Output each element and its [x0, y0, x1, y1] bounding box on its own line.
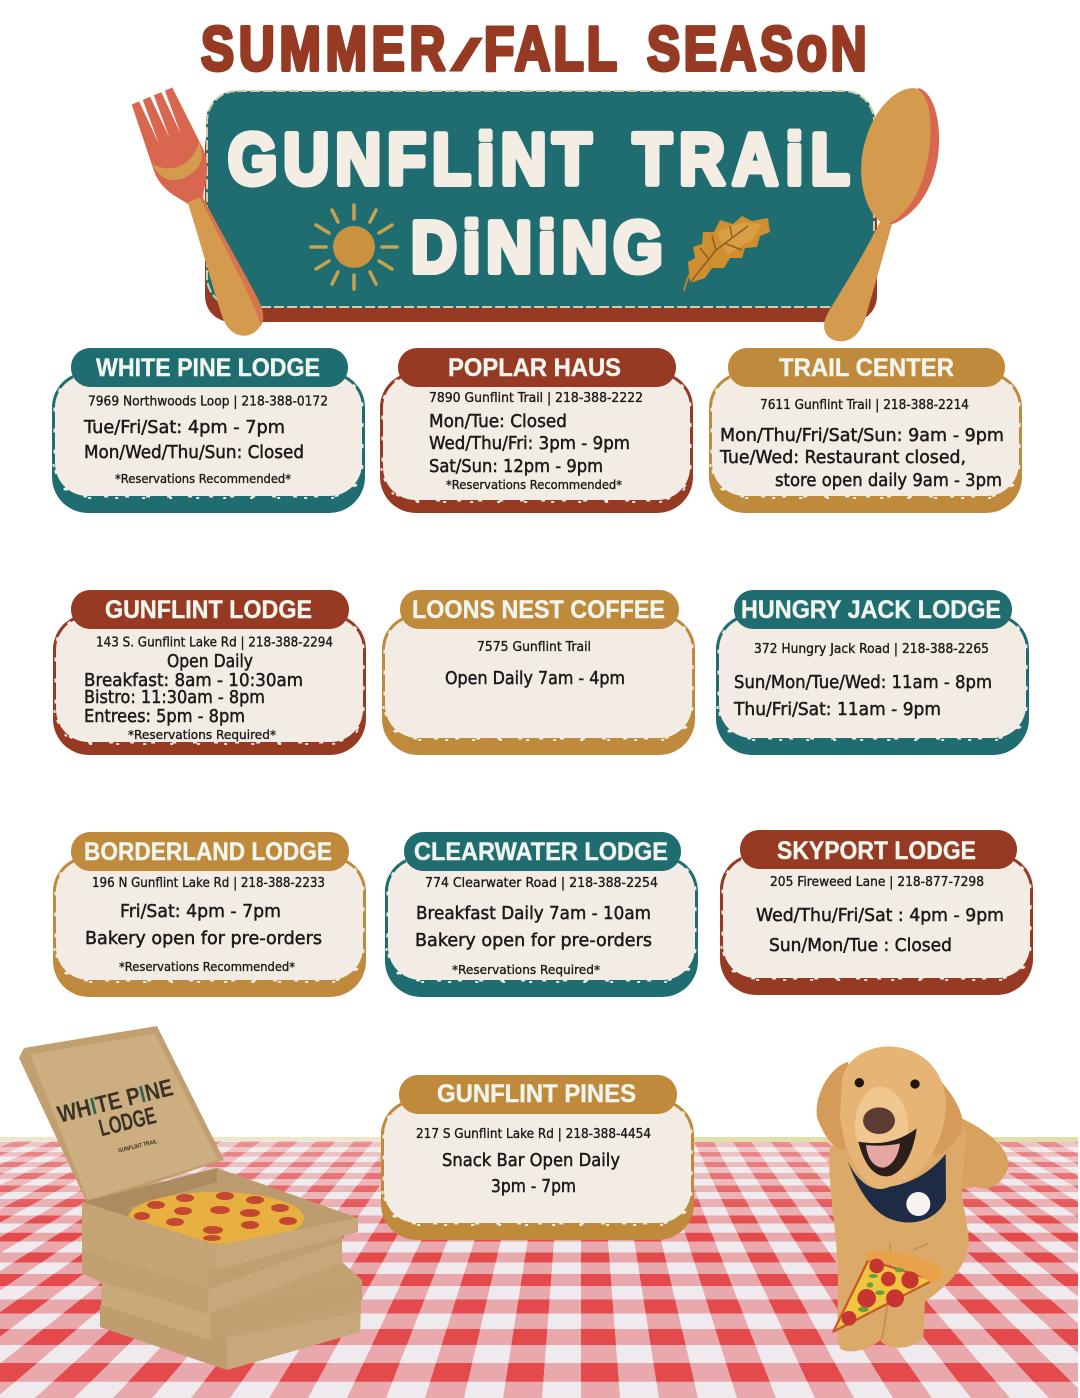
icon: fork — [127, 86, 276, 345]
heading: CLEARWATER LODGE — [414, 838, 668, 866]
note: *Reservations Recommended* — [446, 477, 622, 492]
panel: Loons Nest Coffee — [382, 590, 695, 755]
heading: LOONS NEST COFFEE — [412, 596, 665, 624]
title: Summer/Fall Season — [201, 14, 870, 83]
address: 7611 Gunflint Trail | 218-388-2214 — [760, 398, 969, 413]
address: 205 Fireweed Lane | 218-877-7298 — [770, 875, 984, 890]
address: 196 N Gunflint Lake Rd | 218-388-2233 — [92, 876, 325, 891]
hours: Wed/Thu/Fri/Sat : 4pm - 9pm — [756, 905, 1004, 926]
bandana — [847, 1154, 946, 1222]
panel: Gunflint Lodge — [53, 590, 366, 755]
heading: HUNGRY JACK LODGE — [741, 596, 1001, 624]
note: *Reservations Recommended* — [115, 471, 291, 486]
banner heading: DiNiNG — [411, 208, 669, 288]
hours — [415, 903, 652, 951]
hours: Mon/Wed/Thu/Sun: Closed — [84, 442, 304, 463]
address: 7890 Gunflint Trail | 218-388-2222 — [429, 391, 643, 406]
heading: SKYPORT LODGE — [777, 837, 976, 865]
title: Summer/Fall Season: SUMMER — [201, 14, 450, 83]
heading: TRAIL CENTER — [779, 354, 954, 382]
hours: Breakfast: 8am - 10:30am — [84, 670, 303, 691]
hours — [429, 411, 630, 477]
nose — [863, 1107, 895, 1134]
address: 372 Hungry Jack Road | 218-388-2265 — [754, 642, 989, 657]
title: Summer/Fall Season: FALL — [484, 14, 620, 83]
heading: POPLAR HAUS — [448, 354, 621, 382]
pizza — [128, 1192, 304, 1244]
hours — [442, 1150, 620, 1197]
hours: Open Daily 7am - 4pm — [445, 668, 625, 689]
note: *Reservations Required* — [452, 962, 600, 977]
illustration: stack of pizza boxes — [19, 1026, 362, 1370]
panel: Borderland Lodge — [53, 832, 366, 997]
lid logo: GUNFLINT TRAIL — [118, 1139, 158, 1155]
address: 217 S Gunflint Lake Rd | 218-388-4454 — [416, 1127, 651, 1142]
hours: Sun/Mon/Tue : Closed — [769, 935, 952, 956]
hours: Fri/Sat: 4pm - 7pm — [120, 901, 281, 922]
hours: Bakery open for pre-orders — [85, 928, 322, 949]
hours: Snack Bar Open Daily — [442, 1150, 620, 1171]
banner heading: TRAiL — [633, 120, 857, 200]
hours: Mon/Thu/Fri/Sat/Sun: 9am - 9pm — [720, 425, 1004, 446]
panel: Trail Center — [709, 348, 1022, 513]
panel: Clearwater Lodge — [385, 832, 698, 997]
lid logo: LODGE — [96, 1102, 159, 1142]
hours: Mon/Tue: Closed — [429, 411, 567, 432]
title: Summer/Fall Season: SEASoN — [647, 14, 870, 83]
panel: White Pine Lodge — [52, 348, 365, 513]
hours: Open Daily — [167, 651, 253, 672]
hours — [83, 417, 304, 463]
address: 7969 Northwoods Loop | 218-388-0172 — [88, 394, 328, 410]
banner heading — [228, 120, 857, 288]
banner plaque — [205, 91, 877, 322]
hours: Tue/Fri/Sat: 4pm - 7pm — [83, 417, 285, 438]
hours — [733, 672, 992, 720]
hours: Sat/Sun: 12pm - 9pm — [429, 456, 603, 477]
address: 143 S. Gunflint Lake Rd | 218-388-2294 — [96, 636, 333, 650]
heading: BORDERLAND LODGE — [84, 838, 332, 866]
panel: Hungry Jack Lodge — [716, 590, 1029, 755]
heading: WHITE PINE LODGE — [96, 354, 320, 382]
checkered tablecloth — [0, 1137, 1080, 1398]
icon: spoon — [824, 88, 939, 341]
panel: Skyport Lodge — [720, 830, 1033, 995]
pizza slice — [833, 1251, 942, 1332]
lid logo: WHITE PINE — [55, 1074, 176, 1129]
title: Summer/Fall Season: / — [452, 31, 482, 80]
hours — [719, 425, 1004, 491]
heading: GUNFLINT LODGE — [105, 596, 312, 624]
hours: 3pm - 7pm — [491, 1176, 576, 1197]
eyes — [855, 1078, 920, 1089]
hours — [84, 651, 303, 727]
bottom boxes — [82, 1202, 362, 1370]
hours: store open daily 9am - 3pm — [775, 470, 1002, 491]
hours: Thu/Fri/Sat: 11am - 9pm — [733, 699, 941, 720]
hours: Wed/Thu/Fri: 3pm - 9pm — [429, 433, 630, 454]
ears and head — [817, 1047, 962, 1190]
banner heading: GUNFLiNT — [228, 120, 597, 200]
hours: Breakfast Daily 7am - 10am — [416, 903, 651, 924]
hours: Bistro: 11:30am - 8pm — [84, 687, 265, 708]
heading: GUNFLINT PINES — [437, 1080, 636, 1108]
hours: Bakery open for pre-orders — [415, 930, 652, 951]
address: 7575 Gunflint Trail — [477, 640, 591, 655]
open lid — [19, 1026, 224, 1205]
hours: Sun/Mon/Tue/Wed: 11am - 8pm — [734, 672, 992, 693]
hours — [85, 901, 322, 949]
lid logo — [55, 1074, 185, 1167]
hours: Tue/Wed: Restaurant closed, — [719, 447, 966, 468]
illustration: golden retriever with pizza slice — [817, 1047, 1008, 1351]
panel: Gunflint Pines — [381, 1075, 694, 1240]
icon: autumn leaf — [684, 216, 770, 291]
address: 774 Clearwater Road | 218-388-2254 — [425, 876, 658, 891]
dog body — [829, 1113, 1008, 1351]
mouth and tongue — [858, 1128, 917, 1176]
hours: Entrees: 5pm - 8pm — [84, 706, 245, 727]
hours — [756, 905, 1004, 956]
note: *Reservations Recommended* — [119, 959, 295, 974]
top box with pizza — [82, 1168, 358, 1270]
icon: sun — [311, 205, 397, 289]
note: *Reservations Required* — [128, 727, 276, 742]
banner: Gunflint Trail Dining — [127, 86, 939, 345]
panel: Poplar Haus — [380, 348, 693, 513]
